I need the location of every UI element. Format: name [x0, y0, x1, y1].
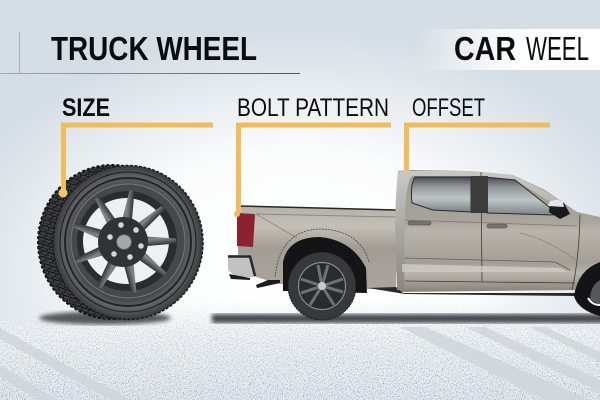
road floor — [0, 300, 600, 400]
callout line: bolt pattern — [234, 125, 391, 217]
label: size: SIZE — [62, 94, 110, 122]
ground shadows — [39, 312, 600, 324]
title: truck wheel: TRUCK WHEEL — [51, 30, 257, 67]
rear window — [411, 177, 471, 212]
cab roof edge — [395, 171, 565, 290]
door pillars — [471, 176, 488, 213]
rear wheel — [288, 252, 356, 320]
rocker highlight — [402, 264, 568, 272]
bed side crease — [256, 214, 396, 238]
pickup truck — [228, 170, 600, 320]
wheel arch — [275, 229, 369, 277]
underbody — [368, 287, 578, 296]
tail light — [237, 213, 255, 247]
bed top edge — [240, 206, 396, 210]
callout line: offset — [406, 125, 550, 171]
label: offset: OFFSET — [412, 94, 485, 122]
panel: car weel heading: CAR — [454, 30, 516, 67]
door seams and body lines — [405, 172, 580, 290]
door handles — [408, 221, 507, 228]
callout line: size — [58, 125, 213, 198]
sidewall rings — [60, 172, 196, 312]
front window — [485, 177, 553, 215]
front wheel — [574, 262, 600, 316]
exhaust and hitch — [229, 274, 280, 288]
truck wheel illustration — [38, 165, 203, 320]
rear bumper — [228, 255, 256, 277]
tire sidewall — [53, 166, 203, 320]
header rule: truck wheel — [0, 32, 300, 74]
wheel well — [283, 237, 367, 293]
cab body — [396, 170, 600, 292]
bumper top edge — [228, 256, 255, 276]
truck bed — [238, 206, 396, 289]
side mirror — [548, 200, 570, 219]
label: bolt pattern: BOLT PATTERN — [237, 94, 389, 122]
rim — [71, 184, 185, 298]
panel: car weel heading — [415, 29, 600, 70]
tire tread back — [38, 165, 186, 319]
